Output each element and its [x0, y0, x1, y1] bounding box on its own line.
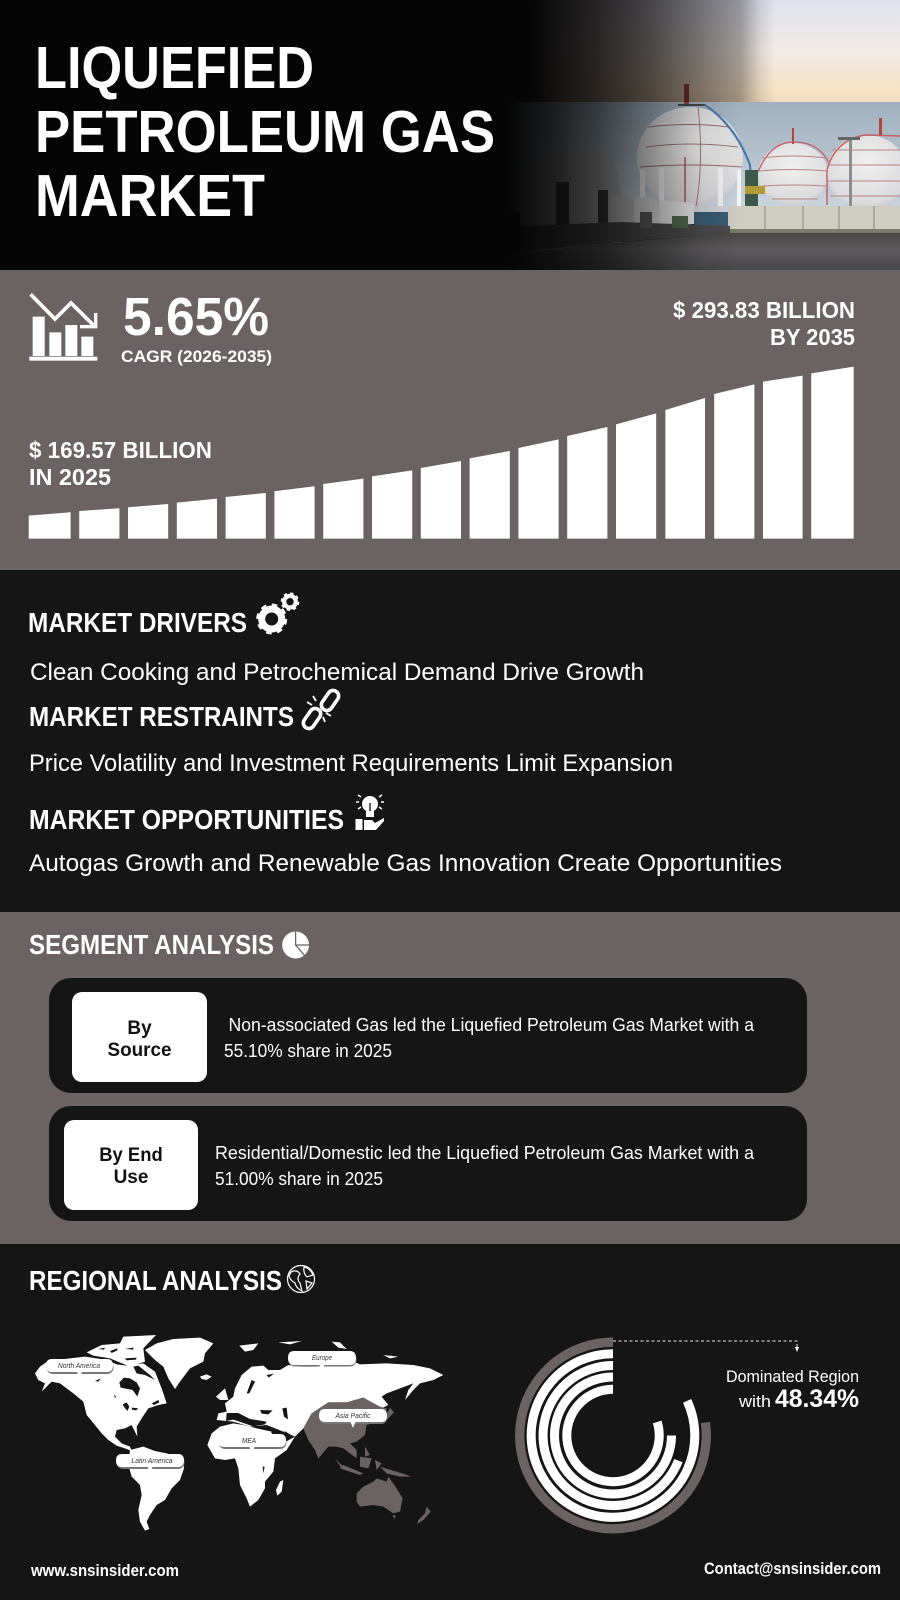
title: PETROLEUM GAS	[35, 98, 495, 165]
label box: by source: Source	[108, 1040, 172, 1061]
stat: CAGR: CAGR (2026-2035)	[121, 348, 272, 366]
text: by source finding	[224, 1015, 755, 1061]
heading: regional analysis: REGIONAL ANALYSIS	[29, 1265, 282, 1296]
stat: 2035 value	[673, 297, 855, 350]
callout: dominated region	[726, 1367, 859, 1413]
heading: market opportunities: MARKET OPPORTUNITIES	[29, 804, 344, 835]
title: LIQUEFIED	[35, 34, 314, 101]
stat: CAGR: 5.65%	[123, 287, 269, 347]
label box: by end use: By End	[99, 1145, 163, 1166]
map: Africa and Eurasia	[207, 1341, 443, 1524]
bar chart: market growth	[29, 367, 854, 539]
map callout: Latin America: Latin America	[132, 1456, 172, 1465]
map callout: Europe	[288, 1351, 356, 1371]
card: by source	[49, 978, 807, 1093]
stat: 2025 value	[29, 437, 212, 490]
stat: 2025 value: IN 2025	[29, 464, 111, 490]
panel: market dynamics	[0, 570, 900, 912]
map: Asia Pacific highlighted	[303, 1398, 431, 1524]
text: by end use finding: 51.00% share in 2025	[215, 1169, 383, 1189]
card: by end use	[49, 1106, 807, 1221]
map callout: MEA	[218, 1434, 286, 1453]
text: opportunities: Autogas Growth and Renewable Gas Innovation Create Opportunities	[29, 850, 782, 877]
map callout: North America: North America	[58, 1361, 100, 1370]
title: MARKET	[35, 162, 265, 229]
radial chart	[520, 1342, 706, 1529]
icon: idea in hand	[356, 795, 384, 830]
text: by end use finding: Residential/Domestic led the Liquefied Petroleum Gas Market with a	[215, 1143, 755, 1163]
panel: segment analysis	[0, 912, 900, 1244]
icon: growth chart	[29, 294, 97, 361]
stat: 2035 value: BY 2035	[770, 324, 855, 350]
panel: market size	[0, 270, 900, 570]
callout: dominated region: Dominated Region	[726, 1367, 859, 1386]
label box: by source	[72, 992, 207, 1082]
panel: regional analysis	[0, 1244, 900, 1600]
map callout: MEA: MEA	[242, 1436, 256, 1445]
panel: header	[0, 0, 900, 270]
stat: 2035 value: $ 293.83 BILLION	[673, 297, 855, 323]
map callout: Asia Pacific: Asia Pacific	[335, 1411, 371, 1420]
world map	[35, 1335, 443, 1531]
title	[35, 34, 495, 229]
heading: segment analysis: SEGMENT ANALYSIS	[29, 929, 274, 960]
text: by source finding: 55.10% share in 2025	[224, 1041, 392, 1061]
callout: dominated region: 48.34%	[775, 1385, 859, 1413]
map callout: Europe: Europe	[312, 1353, 332, 1362]
label box: by end use	[64, 1120, 198, 1210]
footer: website: www.snsinsider.com	[30, 1561, 179, 1580]
map callout: North America	[46, 1359, 114, 1378]
map: Americas and Greenland	[35, 1335, 213, 1531]
arrow: dashed leader	[613, 1341, 799, 1352]
map callout: Latin America	[116, 1454, 184, 1473]
icon: pie chart	[282, 931, 310, 958]
stat: 2025 value: $ 169.57 BILLION	[29, 437, 212, 463]
text: by source finding: Non-associated Gas led the Liquefied Petroleum Gas Market with a	[228, 1015, 755, 1035]
icon: gears	[258, 593, 298, 633]
text: by end use finding	[215, 1143, 755, 1189]
icon: broken chain	[301, 688, 341, 731]
icon: globe	[288, 1266, 314, 1292]
text: restraints: Price Volatility and Investment Requirements Limit Expansion	[29, 750, 673, 777]
text: drivers: Clean Cooking and Petrochemical Demand Drive Growth	[30, 659, 644, 686]
heading: market restraints: MARKET RESTRAINTS	[29, 701, 294, 732]
header photo: gas storage spheres	[480, 0, 900, 270]
map callout: Asia Pacific	[319, 1409, 388, 1428]
label box: by source: By	[127, 1018, 152, 1039]
callout: dominated region: with	[738, 1392, 771, 1411]
heading: market drivers: MARKET DRIVERS	[28, 607, 247, 638]
label box: by end use: Use	[114, 1167, 148, 1188]
